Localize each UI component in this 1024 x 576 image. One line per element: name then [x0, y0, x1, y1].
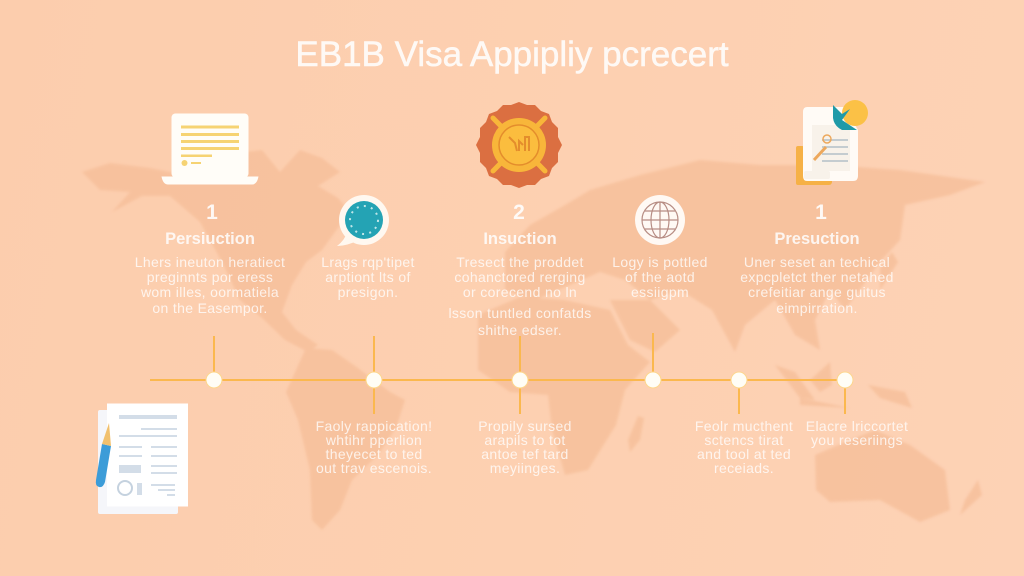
lower text 2: meyiinges. [490, 460, 560, 476]
step 2 number: 2 [513, 201, 525, 224]
japan [880, 252, 898, 290]
callout text: globe: essiigpm [631, 284, 689, 300]
step 3 number: 1 [815, 201, 827, 224]
new zealand [960, 480, 982, 515]
step 3 text: expcpletct ther netahed [740, 269, 894, 285]
lower text 2 [478, 418, 572, 476]
lower text 4: Elacre lriccortet [806, 418, 908, 434]
callout text: left bubble: arptiont lts of [325, 269, 411, 285]
step 1 text: wom illes, oormatiela [141, 284, 279, 300]
icon: teal speech bubble [337, 195, 389, 246]
lower text 4 [806, 418, 908, 448]
step 3 text: Uner seset an techical [744, 254, 890, 270]
north america [82, 150, 350, 352]
africa [478, 297, 650, 475]
step 2 text: or corecend no ln [463, 284, 577, 300]
step 1 text [135, 254, 285, 316]
lower text 3: Feolr mucthent [695, 418, 793, 434]
madagascar [628, 416, 644, 452]
lower text 1 [316, 418, 432, 476]
lower text 2: arapils to tot [484, 432, 566, 448]
lower text 3 [695, 418, 793, 476]
lower text 1: whtihr pperlion [326, 432, 422, 448]
indonesia [775, 362, 912, 408]
lower text 3: sctencs tirat [704, 432, 784, 448]
icon: paper stack with pencil [96, 404, 188, 514]
icon: document with badge [796, 100, 868, 185]
step 2 text [454, 254, 586, 300]
step 3 heading: Presuction [774, 230, 860, 248]
lower text 1: out trav escenois. [316, 460, 432, 476]
step 2 heading: Insuction [483, 230, 557, 248]
lower text 1: theyecet to ted [325, 446, 423, 462]
callout text: globe [612, 254, 708, 300]
icon: laptop [162, 114, 258, 184]
step 2 extra text [448, 305, 592, 338]
callout text: globe: Logy is pottled [612, 254, 708, 270]
europe and asia [505, 160, 985, 352]
lower text 4: you reseriings [811, 432, 903, 448]
step 3 text: eimpirration. [776, 300, 858, 316]
callout text: left bubble: Lrags rqp'tipet [321, 254, 415, 270]
step 2 extra text: lsson tuntled confatds [448, 305, 592, 321]
step 1 text: Lhers ineuton heratiect [135, 254, 285, 270]
lower text 2: antoe tef tard [481, 446, 569, 462]
step 2 extra text: shithe edser. [478, 322, 562, 338]
step 1 number: 1 [206, 201, 218, 224]
step 1 heading: Persiuction [165, 230, 255, 248]
callout text: left bubble: presigon. [338, 284, 398, 300]
step 3 text [740, 254, 894, 316]
title: EB1B Visa Appipliy pcrecert [295, 35, 729, 74]
step 1 text: preginnts por eress [147, 269, 273, 285]
callout text: globe: of the aotd [625, 269, 695, 285]
south america [286, 348, 405, 530]
callout text: left bubble [321, 254, 415, 300]
step 2 text: Tresect the proddet [456, 254, 584, 270]
icon: globe [635, 195, 685, 245]
lower text 2: Propily sursed [478, 418, 572, 434]
lower text 3: receiads. [714, 460, 774, 476]
step 1 text: on the Easempor. [152, 300, 268, 316]
lower text 3: and tool at ted [697, 446, 791, 462]
lower text 1: Faoly rappication! [316, 418, 432, 434]
australia [815, 430, 950, 522]
step 2 text: cohanctored rerging [454, 269, 586, 285]
arabia [610, 300, 680, 352]
icon: orange badge [476, 102, 562, 188]
step 3 text: crefeitiar ange guitus [748, 284, 886, 300]
